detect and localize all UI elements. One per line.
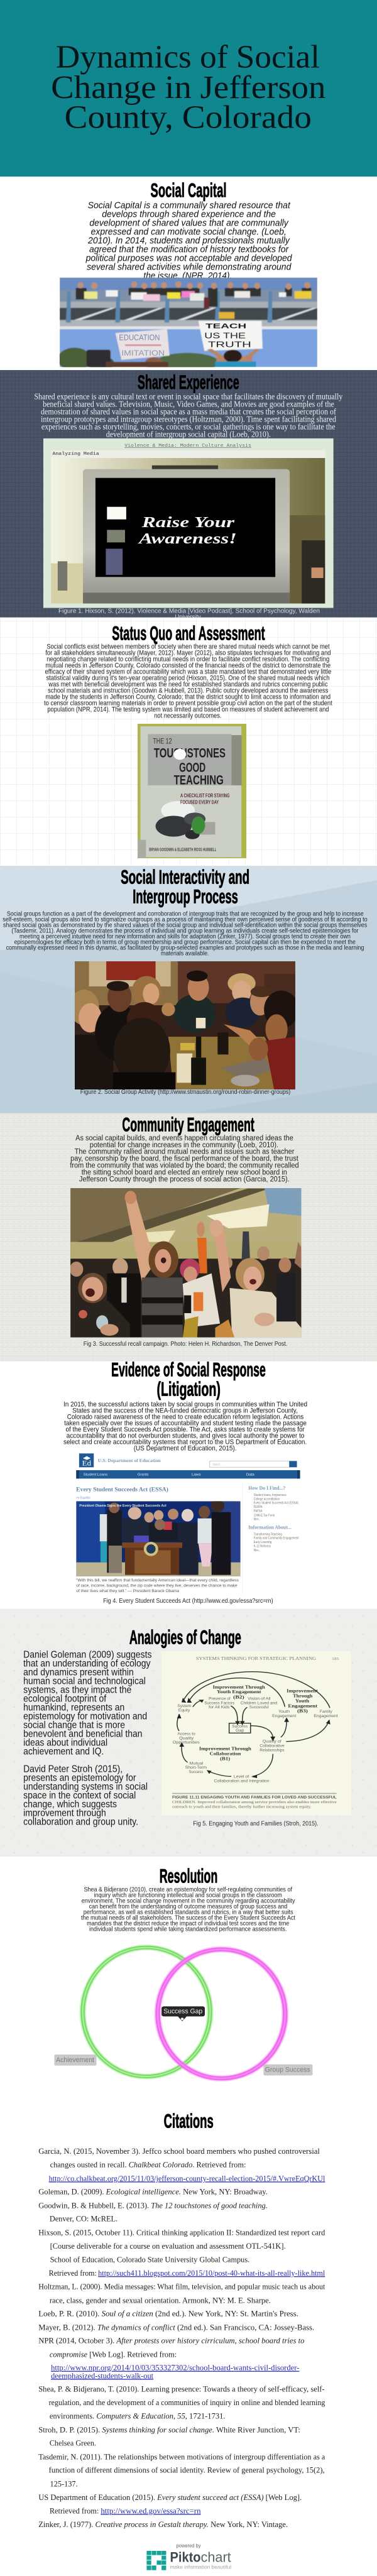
text block: social capital: develops through shared experience and the <box>102 209 276 219</box>
image: every student succeeds act web page screenshot: Early Learning <box>254 1541 271 1544</box>
image: the 12 touchstones of good teaching book cover: THE 12 <box>153 736 172 745</box>
text block: evidence: In 2015, the successful actions taken by social groups in communities within The United <box>63 1400 307 1408</box>
panel: social interactivity and intergroup process <box>0 866 377 1113</box>
photo: successful recall campaign crowd <box>70 1188 302 1338</box>
caption: figure 1: Figure 1. Hixson, S. (2012). Violence & Media [Video Podcast]. School of Psychology, Walden <box>58 608 320 614</box>
caption: figure 1 <box>58 608 320 621</box>
text block: goleman and stroh: human social and technological <box>23 1676 146 1686</box>
image: the 12 touchstones of good teaching book cover <box>137 724 246 858</box>
caption: figure 1: University. <box>175 614 202 621</box>
text block: evidence: States and the success of the NEA-funded democratic groups in Jefferson County, <box>72 1406 298 1414</box>
panel: community engagement <box>0 1113 377 1362</box>
text block: resolution: environment. The social change movement in the community regarding accountability <box>82 1897 295 1904</box>
image: every student succeeds act web page screenshot: of race, income, background, the zip code where they live, deserves the chance to make <box>76 1584 238 1588</box>
diagram: systems thinking engaging youth and families: Success Factors <box>204 1701 235 1705</box>
diagram: systems thinking engaging youth and families: Quality <box>179 1737 194 1740</box>
image: every student succeeds act web page screenshot: Student Loans <box>84 1473 107 1476</box>
image: every student succeeds act web page screenshot: Data <box>246 1473 254 1476</box>
caption: figure 5: Fig 5. Engaging Youth and Families (Stroh, 2015). <box>193 1820 319 1827</box>
image: every student succeeds act web page screenshot: FAFSA <box>254 1510 263 1514</box>
text block: shared experience <box>34 393 343 439</box>
diagram: systems thinking engaging youth and families <box>161 1651 351 1815</box>
references: goleman through npr <box>38 2188 325 2380</box>
text block: goleman and stroh: and dynamics present within <box>23 1667 134 1678</box>
heading: evidence of social response (litigation): (Litigation) <box>156 1378 221 1400</box>
diagram: systems thinking engaging youth and families: CHILDREN. Improved collaboration among service providers also enables more effective <box>172 1800 337 1804</box>
image: raise your awareness television <box>43 439 334 608</box>
label: achievement <box>54 2055 96 2066</box>
diagram: systems thinking engaging youth and families: outreach to youth and their families, thereby further increasing system equity. <box>172 1805 312 1809</box>
text block: resolution: Shea & Bidjerano (2010), create an epistemology for self-regulating communities of <box>84 1886 292 1893</box>
reference: garcia: http://co.chalkbeat.org/2015/11/03/jefferson-county-recall-election-2015/#.VwreEqQrKUl <box>49 2174 325 2183</box>
text block: resolution: can benefit from the understanding of outcome measures of group success and <box>89 1903 287 1910</box>
text block: goleman and stroh: space in the context of social <box>23 1790 136 1801</box>
diagram: systems thinking engaging youth and families: Collaborative <box>260 1744 285 1748</box>
text block: evidence <box>63 1400 307 1452</box>
references: goleman through npr: Loeb, P. R. (2010). Soul of a citizen (2nd ed.). New York, NY: St. Martin's Press. <box>38 2310 298 2318</box>
heading: evidence of social response (litigation) <box>111 1359 266 1400</box>
image: every student succeeds act web page screenshot: of their lives what they will.” — President Barack Obama <box>76 1589 179 1593</box>
panel: resolution <box>54 1865 312 2078</box>
references: goleman through npr: [Course deliverable for a course on evaluation and assessment OTL-541K]. <box>50 2242 286 2251</box>
references: shea through zinker: function of different dimensions of social identity. Review of general psychology, 15(2), <box>49 2466 325 2475</box>
text block: status quo: not necessarily outcomes. <box>154 711 221 719</box>
diagram: systems thinking engaging youth and families: (B3) <box>297 1708 308 1713</box>
diagram: systems thinking engaging youth and families: 185 <box>332 1656 339 1661</box>
references: shea through zinker: Stroh, D. P. (2015). Systems thinking for social change. White River Junction, VT: <box>38 2425 300 2435</box>
image: every student succeeds act web page screenshot: Search... <box>212 1463 222 1466</box>
references: shea through zinker: Shea, P. & Bidjerano, T. (2010). Learning presence: Towards a theory of self-efficacy, self- <box>38 2385 325 2394</box>
text block: community engagement: pay, censorship by the board, the fiscal performance of the board, the trust <box>70 1154 298 1162</box>
title: Change in Jefferson <box>51 69 325 106</box>
diagram: systems thinking engaging youth and families: Vision of All <box>248 1697 271 1701</box>
image: every student succeeds act web page screenshot: Every Student Succeeds Act (ESSA) <box>76 1487 168 1493</box>
label: success gap: Success Gap <box>163 2008 202 2015</box>
references: goleman through npr: http://such411.blogspot.com/2015/10/post-40-what-its-all-really-like.html <box>98 2269 325 2278</box>
diagram: systems thinking engaging youth and families: SYSTEMS THINKING FOR STRATEGIC PLANNING <box>196 1656 317 1661</box>
text block: social capital: political purposes was not acceptable and developed <box>85 253 292 263</box>
text block: community engagement: the sitting school board and elected an entirely new school board in <box>82 1168 287 1176</box>
image: every student succeeds act web page screenshot: U.S. Department of Education <box>98 1458 161 1463</box>
references: shea through zinker <box>38 2385 325 2530</box>
text block: goleman and stroh: collaboration and group unity. <box>23 1816 138 1827</box>
image: raise your awareness television: Analyzing Media <box>52 451 99 457</box>
text block: social capital <box>85 200 292 281</box>
diagram: systems thinking engaging youth and families: Collaboration <box>210 1751 241 1756</box>
references: goleman through npr: School of Education, Colorado State University Global Campus. <box>50 2255 249 2264</box>
references: goleman through npr: deemphasized-students-walk-out <box>51 2371 153 2380</box>
heading: social interactivity and intergroup process: Intergroup Process <box>133 886 238 908</box>
text block: resolution <box>81 1886 295 1933</box>
text block: social capital: 2010). In 2014, students and professionals mutually <box>87 236 290 246</box>
title: Dynamics of Social <box>56 39 320 75</box>
image: every student succeeds act web page screenshot: Information About... <box>248 1524 292 1530</box>
text block: social capital: Social Capital is a communally shared resource that <box>88 200 291 210</box>
diagram: systems thinking engaging youth and families: Opportunities <box>173 1740 200 1745</box>
photo: students protesting on overpass: IMITATION <box>121 349 165 357</box>
reference: garcia: changes ousted in recall. Chalkbeat Colorado. Retrieved from: <box>50 2161 246 2169</box>
diagram: systems thinking engaging youth and families: Engagement <box>272 1714 297 1718</box>
text block: shared experience: development of intergroup social capital (Loeb, 2010). <box>106 430 271 439</box>
references: shea through zinker: Chelsea Green. <box>50 2439 96 2447</box>
text block: resolution: mandates that the district reduce the impact of individual test scores and the time <box>87 1920 289 1927</box>
text block: evidence: (US Department of Education, 2015). <box>134 1444 237 1452</box>
references: goleman through npr: compromise [Web Log]. Retrieved from: <box>50 2350 177 2359</box>
diagram: systems thinking engaging youth and families: Relationships <box>260 1749 285 1752</box>
text block: goleman and stroh: ideas about individual <box>23 1737 107 1748</box>
references: goleman through npr: race, class, gender and sexual orientation. Armonk, NY: M. E. Sharpe. <box>50 2296 271 2305</box>
diagram: systems thinking engaging youth and families: Equity <box>178 1708 190 1713</box>
text block: community engagement: As social capital builds, and events happen circulating shared ideas the <box>75 1133 293 1142</box>
label: success gap <box>161 2006 205 2021</box>
diagram: systems thinking engaging youth and families: Short-Term <box>185 1766 207 1770</box>
caption: figure 2: Figure 2. Social Group Activity (http://www.stmaustin.org/round-robin-dinner-groups) <box>80 1089 290 1096</box>
image: every student succeeds act web page screenshot: Transforming Teaching <box>254 1533 282 1536</box>
references: goleman through npr: Holtzman, L. (2000). Media messages: What film, television, and popular music teach us about <box>38 2283 325 2291</box>
references: goleman through npr: Goodwin, B. & Hubbell, E. (2013). The 12 touchstones of good teaching. <box>38 2201 268 2210</box>
photo: students protesting on overpass: US THE <box>204 332 246 341</box>
text block: resolution: the mutual needs of all stakeholders. The success of the Every Student Succeeds Act <box>81 1914 295 1921</box>
diagram: systems thinking engaging youth and families: Access to <box>177 1732 195 1737</box>
text block: goleman and stroh: understanding systems in social <box>23 1781 148 1792</box>
text block: status quo <box>44 642 332 719</box>
diagram: systems thinking engaging youth and families: for All Kids <box>209 1705 230 1710</box>
panel: analogies of change: Analogies of Change <box>129 1627 241 1649</box>
caption: figure 4: Fig 4. Every Student Succeeds Act (http://www.ed.gov/essa?src=rn) <box>103 1598 273 1605</box>
diagram: systems thinking engaging youth and families: Youth <box>278 1710 290 1714</box>
photo: students protesting on overpass: EDUCATION <box>119 334 160 342</box>
text block: goleman and stroh: social change that is more <box>23 1720 125 1730</box>
text block: goleman and stroh: ecological footprint of <box>23 1693 106 1704</box>
circle: group success <box>158 1950 285 2078</box>
diagram: systems thinking engaging youth and families: Mutual <box>190 1762 204 1766</box>
references: shea through zinker: US Department of Education (2015). Every student succeed act (ESSA) [Web Log]. <box>38 2493 302 2502</box>
panel: evidence of social response <box>63 1359 307 1605</box>
text block: resolution: performance, as well as established standards and rubrics, in a way that better suits <box>84 1909 293 1916</box>
image: raise your awareness television: Awareness! <box>138 530 237 547</box>
text block: goleman and stroh: systems, as they impact the <box>23 1684 131 1695</box>
logo: powered by piktochart: Pikto <box>170 2550 201 2565</box>
label: group success: Group Success <box>265 2066 310 2073</box>
diagram: systems thinking engaging youth and families: (B1) <box>220 1756 231 1761</box>
text block: goleman and stroh: humankind, represents an <box>23 1702 124 1713</box>
image: every student succeeds act web page screenshot: K-12 Reforms <box>254 1545 271 1548</box>
image: every student succeeds act web page screenshot: 1098-E Tax Form <box>254 1514 275 1517</box>
panel: shared experience <box>0 370 377 621</box>
photo: students protesting on overpass: TEACH <box>205 322 246 330</box>
diagram: systems thinking engaging youth and families: Successful <box>249 1705 269 1710</box>
image: every student succeeds act web page screenshot: Every Student Succeeds Act (ESSA) <box>254 1502 298 1505</box>
photo: social group dinner <box>75 961 295 1089</box>
diagram: systems thinking engaging youth and families: Youth <box>295 1698 310 1703</box>
image: the 12 touchstones of good teaching book cover: GOOD <box>179 760 205 775</box>
references: shea through zinker: http://www.ed.gov/essa?src=rn <box>101 2506 201 2515</box>
text block: goleman and stroh: benevolent and beneficial than <box>23 1728 143 1739</box>
text block: goleman and stroh: epistemology for motivation and <box>23 1711 147 1722</box>
panel: citations <box>38 2110 325 2570</box>
references: shea through zinker: Tasdemir, N. (2011). The relationships between motivations of intergroup differentiation as a <box>38 2452 325 2462</box>
panel: analogies of change <box>0 1609 377 1857</box>
image: every student succeeds act web page screenshot: Ed <box>82 1459 91 1467</box>
references: goleman through npr: Denver, CO: McREL. <box>50 2215 117 2223</box>
title <box>51 39 325 135</box>
heading: social interactivity and intergroup process <box>121 866 249 908</box>
text block: goleman and stroh: achievement and IQ. <box>23 1746 104 1757</box>
text block: evidence: taken especially over the issues of accountability and student testing made the passage <box>64 1419 307 1427</box>
references: shea through zinker: regulation, and the development of a communities of inquiry in online and blended learning <box>49 2398 325 2407</box>
references: shea through zinker: environments. Computers & Education, 55, 1721-1731. <box>50 2412 226 2420</box>
diagram: systems thinking engaging youth and families: Presence of <box>209 1697 231 1701</box>
image: every student succeeds act web page screenshot: en Español <box>76 1497 90 1500</box>
image: every student succeeds act web page screenshot: “With this bill, we reaffirm that fundamentally American ideal—that every child, regardless <box>76 1578 239 1583</box>
image: every student succeeds act web page screenshot: Student loans, forgiveness <box>254 1493 287 1497</box>
diagram: systems thinking engaging youth and families: (B2) <box>233 1695 244 1700</box>
text block: goleman and stroh: David Peter Stroh (2015), <box>23 1764 123 1774</box>
text block: social capital: the issue. (NPR, 2014). <box>143 271 232 281</box>
diagram: systems thinking engaging youth and families: Success <box>188 1770 204 1774</box>
image: every student succeeds act web page screenshot <box>76 1453 300 1595</box>
image: every student succeeds act web page screenshot: FERPA <box>254 1505 263 1509</box>
text block: social interactivity <box>3 910 368 957</box>
label: group success <box>263 2065 312 2075</box>
diagram: systems thinking engaging youth and families: FIGURE 11.11 ENGAGING YOUTH AND FAMILIES FOR LOVED AND SUCCESSFUL <box>172 1796 337 1799</box>
references: goleman through npr: http://www.npr.org/2014/10/03/353327302/school-board-wants-civil-disorder- <box>51 2364 300 2372</box>
references: shea through zinker: 125-137. <box>50 2479 78 2488</box>
text block: goleman and stroh: improvement through <box>23 1808 106 1818</box>
diagram: systems thinking engaging youth and families: Improvement Through <box>213 1684 265 1689</box>
text block: social interactivity: materials available. <box>161 950 209 957</box>
panel: title header <box>0 0 377 177</box>
text block: social capital: development of shared values that are communally <box>89 218 289 228</box>
reference: garcia <box>38 2147 325 2183</box>
logo: powered by piktochart: make information beautiful <box>170 2564 231 2570</box>
logo: powered by piktochart: chart <box>201 2550 231 2565</box>
photo: students protesting on overpass: TRUTH <box>208 341 251 349</box>
logo: powered by piktochart <box>146 2543 231 2570</box>
reference: garcia: Garcia, N. (2015, November 3). Jeffco school board members who pushed controversial <box>38 2147 320 2156</box>
heading: citations: Citations <box>164 2110 214 2132</box>
references: goleman through npr: Goleman, D. (2009). Ecological intelligence. New York, NY: Broadway. <box>38 2188 268 2197</box>
logo: powered by piktochart: powered by <box>176 2543 201 2549</box>
references: goleman through npr: NPR (2014, October 3). After protests over history cirriculum, school board tries to <box>38 2337 305 2345</box>
text block: resolution: individual students spend while taking standardized performance assessments. <box>89 1926 287 1933</box>
arrows: causal loops <box>177 1672 330 1776</box>
label: achievement: Achievement <box>56 2057 95 2064</box>
references: goleman through npr: Mayer, B. (2012). The dynamics of conflict (2nd ed.). San Francisco, CA: Jossey-Bass. <box>38 2323 314 2332</box>
diagram: systems thinking engaging youth and families: Improvement <box>287 1688 318 1693</box>
diagram: systems thinking engaging youth and families: Success <box>232 1725 248 1728</box>
photo: students protesting on overpass <box>59 278 318 367</box>
panel: social capital <box>58 179 317 372</box>
diagram: systems thinking engaging youth and families: Gap <box>236 1728 244 1733</box>
image: every student succeeds act web page screenshot: President Obama Signs the Every Student Succeeds Act <box>79 1504 167 1508</box>
diagram: systems thinking engaging youth and families: Quality of <box>263 1740 281 1744</box>
text block: social capital: expressed and can motivate social change. (Loeb, <box>91 227 287 237</box>
image: raise your awareness television: Raise Your <box>141 514 235 531</box>
diagram: systems thinking engaging youth and families: Level of <box>234 1775 249 1779</box>
text block: goleman and stroh: change, which suggests <box>23 1799 117 1809</box>
title: County, Colorado <box>65 99 312 135</box>
diagram: systems thinking engaging youth and families: Engagement <box>314 1714 338 1718</box>
diagram: systems thinking engaging youth and families: Children Loved and <box>241 1701 277 1705</box>
image: every student succeeds act web page screenshot: College accreditation <box>254 1498 280 1501</box>
references: shea through zinker: Zinker, J. (1977). Creative process in Gestalt therapy. New York, NY: Vintage. <box>38 2520 288 2530</box>
text block: evidence: Colorado raised awareness of the need to create education reform legislation. Actions <box>67 1412 303 1421</box>
references: goleman through npr: Hixson, S. (2015, October 11). Critical thinking application II: Standardized test report card <box>38 2228 325 2237</box>
text block: social capital: several shared activities while demonstrating around <box>87 262 292 272</box>
text block: evidence: accountability that do not overburden students, and gives local authority the power to <box>67 1431 305 1439</box>
text block: goleman and stroh: presents an epistemology for <box>23 1772 136 1783</box>
panel: status quo and assessment <box>0 618 377 866</box>
diagram: systems thinking engaging youth and families: Family <box>320 1710 332 1714</box>
caption: figure 3: Fig 3. Successful recall campaign. Photo: Helen H. Richardson, The Denver Post. <box>84 1341 287 1348</box>
diagram: systems thinking engaging youth and families: Collaboration and Integration <box>214 1779 270 1783</box>
references: shea through zinker: Retrieved from: <box>50 2506 99 2515</box>
text block: community engagement: from the community that was violated by the board; the community recalled <box>70 1161 299 1169</box>
image: every student succeeds act web page screenshot: Grants <box>138 1473 148 1476</box>
text block: goleman and stroh: that an understanding of ecology <box>23 1658 151 1669</box>
image: raise your awareness television: Violence & Media: Modern Culture Analysis <box>124 443 251 449</box>
text block: evidence: select and create accountability systems that report to the US Department of Education. <box>63 1438 307 1446</box>
text block: community engagement <box>70 1133 299 1183</box>
text block: goleman and stroh: Daniel Goleman (2009) suggests <box>23 1649 151 1660</box>
circle: achievement <box>83 1948 210 2077</box>
image: every student succeeds act web page screenshot: More... <box>254 1549 261 1553</box>
heading: social capital: Social Capital <box>151 179 226 202</box>
diagram: systems thinking engaging youth and families: Youth Engagement <box>217 1689 261 1695</box>
diagram: systems thinking engaging youth and families: Through <box>293 1693 313 1698</box>
image: every student succeeds act web page screenshot: How Do I Find...? <box>248 1485 285 1491</box>
text block: community engagement: The community rallied around mutual needs and issues such as teacher <box>75 1147 295 1155</box>
text block: evidence: of the Every Student Succeeds Act possible. The Act, asks states to create systems for <box>65 1425 305 1433</box>
text block: resolution: inquiry which are functioning intellectual and social groups in the classroom <box>94 1892 282 1899</box>
heading: social interactivity and intergroup process: Social Interactivity and <box>121 866 249 888</box>
image: every student succeeds act web page screenshot: Family and Community Engagement <box>254 1537 299 1541</box>
text block: goleman and stroh <box>23 1649 151 1827</box>
references: goleman through npr: Retrieved from: <box>49 2269 97 2278</box>
image: every student succeeds act web page screenshot: More... <box>254 1518 261 1522</box>
diagram: systems thinking engaging youth and families: Engagement <box>288 1703 318 1708</box>
text block: social capital: agreed that the modification of history textbooks for <box>89 244 289 254</box>
image: every student succeeds act web page screenshot: Laws <box>192 1473 201 1476</box>
text block: community engagement: Jefferson County through the process of social action (Garcia, 2015). <box>79 1175 290 1183</box>
diagram: systems thinking engaging youth and families: Improvement Through <box>199 1746 252 1751</box>
text block: community engagement: potential for change increases in the community (Loeb, 2010). <box>90 1140 278 1149</box>
panel: resolution: Resolution <box>160 1865 217 1887</box>
image: the 12 touchstones of good teaching book cover: FOCUSED EVERY DAY <box>180 799 219 805</box>
diagram: systems thinking engaging youth and families: System <box>177 1704 192 1708</box>
venn diagram: achievement and group success <box>54 1948 312 2078</box>
panel: shared experience: Shared Experience <box>138 371 239 393</box>
